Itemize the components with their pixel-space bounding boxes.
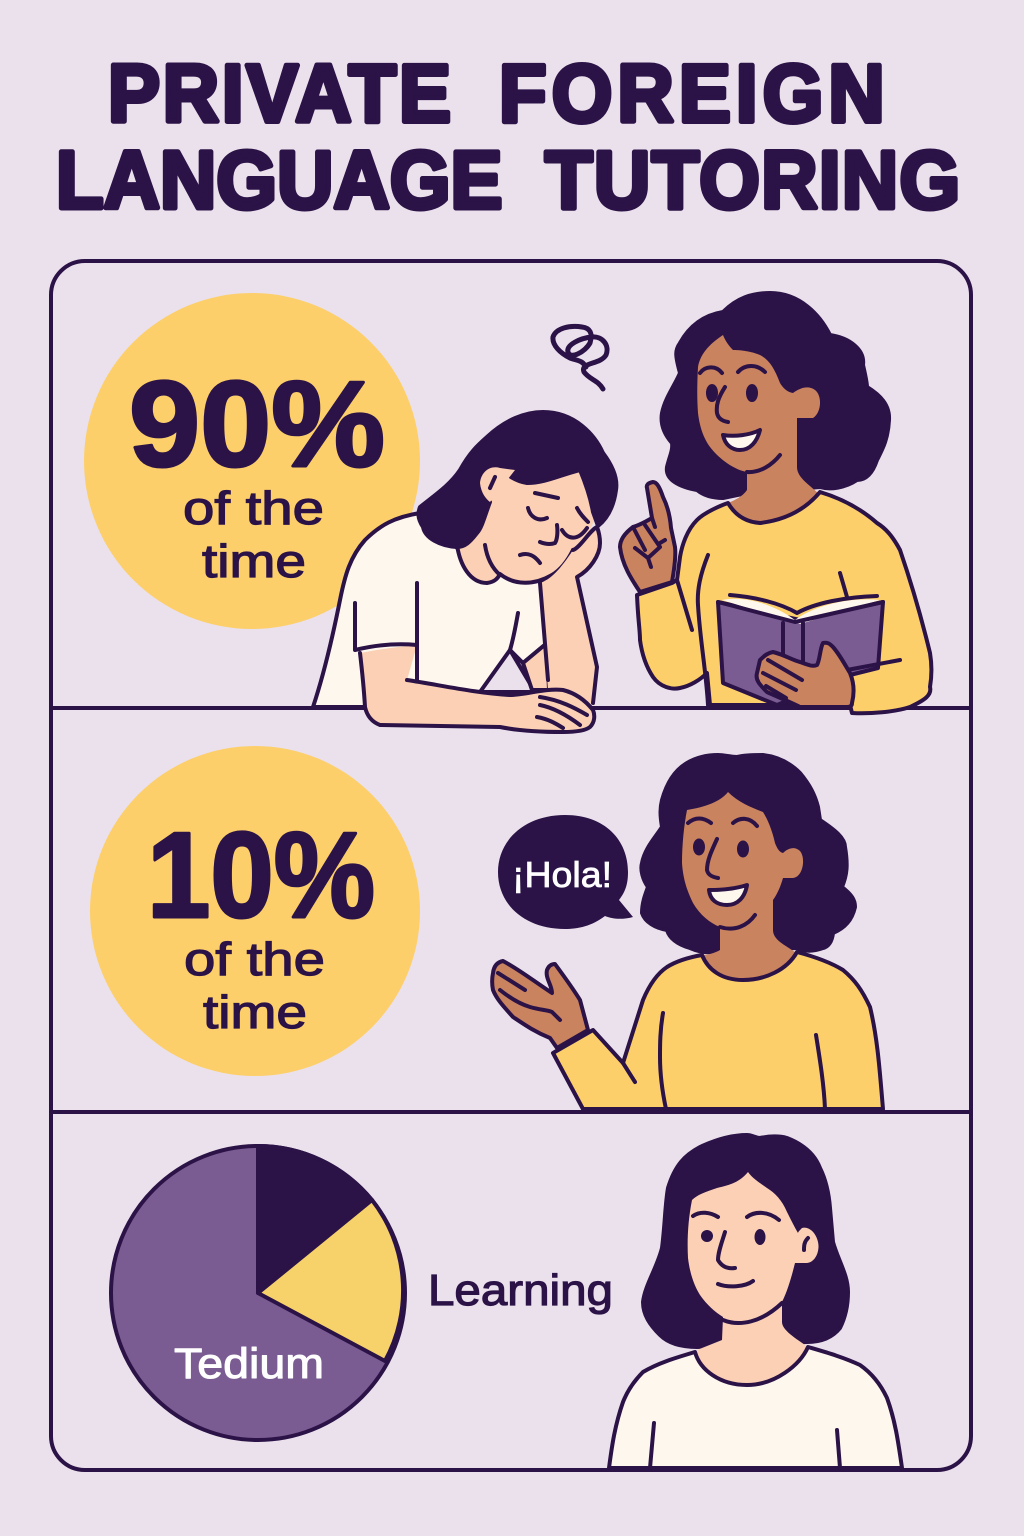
illustration: teacher speaking [492,755,883,1109]
circle: 90%: 90% [129,356,385,492]
title [56,48,960,225]
illustration: happy student [609,1135,902,1468]
label: tedium: Tedium [174,1340,324,1388]
panel frame [51,261,971,1470]
circle: 10%: 10% [147,807,375,943]
illustration: tired student [313,412,616,732]
label: learning: Learning [428,1266,613,1315]
speech bubble: Hola [498,815,633,929]
circle: 90%: of the [183,482,324,534]
icon: confusion squiggle [553,326,607,389]
title: FOREIGN [499,48,885,139]
circle: 10% [90,746,420,1076]
speech bubble: Hola: ¡Hola! [512,854,612,895]
circle: 90%: time [202,535,306,587]
circle: 10%: time [203,986,307,1038]
circle: 10%: of the [184,933,325,985]
pie chart [111,1146,405,1440]
title: LANGUAGE [56,134,503,225]
illustration: teacher with book [620,293,932,713]
title: TUTORING [545,134,960,225]
circle: 90% [84,293,420,629]
title: PRIVATE [108,48,451,139]
